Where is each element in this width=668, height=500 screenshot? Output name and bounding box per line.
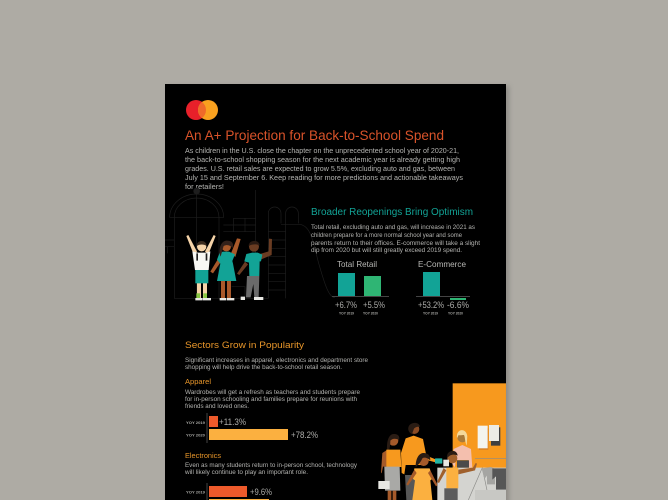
- bar chart: apparel: YOY 2020: [186, 434, 205, 438]
- apparel text block: Wardrobes will get a refresh as teachers and students prepare: [185, 389, 360, 396]
- bar chart: total retail: YOY 2019: [339, 312, 354, 316]
- apparel text block: for in-person schooling and families prepare for reunions with: [185, 396, 357, 403]
- bar chart: e-commerce: YOY 2019: [423, 312, 438, 316]
- store wall: [453, 383, 506, 500]
- intro text block: [185, 148, 464, 191]
- panel: black poster: [165, 84, 506, 500]
- payment tag: [443, 460, 449, 466]
- intro text block: As children in the U.S. close the chapter on the unprecedented school year of 2020-21,: [185, 148, 459, 155]
- cashier: [452, 430, 472, 468]
- bar chart: electronics: [186, 483, 272, 500]
- intro text block: July 15 and September 6. Keep reading for more predictions and actionable takeaways: [185, 175, 464, 182]
- bar chart: e-commerce: +53.2%: [418, 300, 444, 310]
- bar chart: total retail: [332, 259, 389, 316]
- title: An A+ Projection for Back-to-School Spend: [185, 127, 444, 143]
- bar chart: apparel: [186, 413, 318, 443]
- electronics text block: will likely continue to play an important role.: [184, 469, 308, 476]
- child in yellow dress: [406, 453, 438, 500]
- counter: [437, 468, 506, 500]
- intro text block: grades. U.S. retail sales are expected to grow 5.5%, excluding auto and gas, between: [185, 166, 455, 173]
- school line art background: [165, 188, 335, 298]
- sectors text block: shopping will help drive the back-to-school retail season.: [185, 364, 342, 371]
- electronics text block: [184, 462, 358, 476]
- bar chart: apparel: +11.3%: [219, 417, 246, 427]
- reopenings text block: children prepare for a more normal school year and some: [311, 232, 462, 239]
- apparel heading: Apparel: [185, 377, 211, 386]
- bar chart: e-commerce: E-Commerce: [418, 259, 466, 269]
- bar chart: apparel: +78.2%: [291, 430, 318, 440]
- child one: [186, 235, 216, 300]
- shopper woman: [378, 434, 401, 500]
- heading: Sectors Grow: Sectors Grow in Popularity: [185, 340, 304, 351]
- bar chart: apparel: YOY 2019: [186, 421, 205, 425]
- electronics heading: Electronics: [185, 451, 221, 460]
- poster content: [165, 84, 506, 500]
- bar chart: e-commerce: [416, 259, 470, 316]
- bar chart: total retail: +5.5%: [363, 300, 385, 310]
- heading: Broader Reopenings: Broader Reopenings Bring Optimism: [311, 207, 473, 218]
- child two: [210, 238, 241, 300]
- intro text block: the back-to-school shopping season for the next academic year is already getting high: [185, 157, 460, 164]
- apparel text block: friends and loved ones.: [185, 403, 249, 410]
- illustration: three waving children: [186, 235, 272, 300]
- reopenings text block: dip from 2020 but will still greatly exceed 2019 spend.: [311, 247, 462, 254]
- bar chart: electronics: +9.6%: [250, 487, 272, 497]
- hanging shirts: [478, 425, 500, 450]
- sectors text block: [185, 357, 368, 371]
- child three: [237, 239, 272, 300]
- bar chart: e-commerce: -6.6%: [447, 300, 469, 310]
- intro text block: for retailers!: [185, 184, 224, 191]
- boy in yellow shirt: [437, 451, 477, 500]
- panel shadow: [168, 86, 509, 500]
- reopenings text block: parents return to their offices. E-commerce will take a slight: [311, 240, 480, 247]
- bar chart: total retail: YOY 2020: [363, 312, 378, 316]
- reopenings text block: Total retail, excluding auto and gas, will increase in 2021 as: [311, 224, 475, 231]
- bar chart: total retail: +6.7%: [335, 300, 357, 310]
- shopper man: [401, 423, 442, 500]
- clothing rack: [468, 458, 506, 500]
- apparel text block: [185, 389, 360, 410]
- electronics text block: Even as many students return to in-person school, technology: [185, 462, 358, 469]
- reopenings text block: [311, 224, 480, 254]
- sectors text block: Significant increases in apparel, electronics and department store: [185, 357, 368, 364]
- icon: two circle logo: [186, 100, 218, 120]
- illustration: store and shoppers: [378, 383, 506, 500]
- bar chart: electronics: YOY 2019: [186, 490, 205, 494]
- bar chart: total retail: Total Retail: [337, 259, 377, 269]
- bar chart: e-commerce: YOY 2020: [448, 312, 463, 316]
